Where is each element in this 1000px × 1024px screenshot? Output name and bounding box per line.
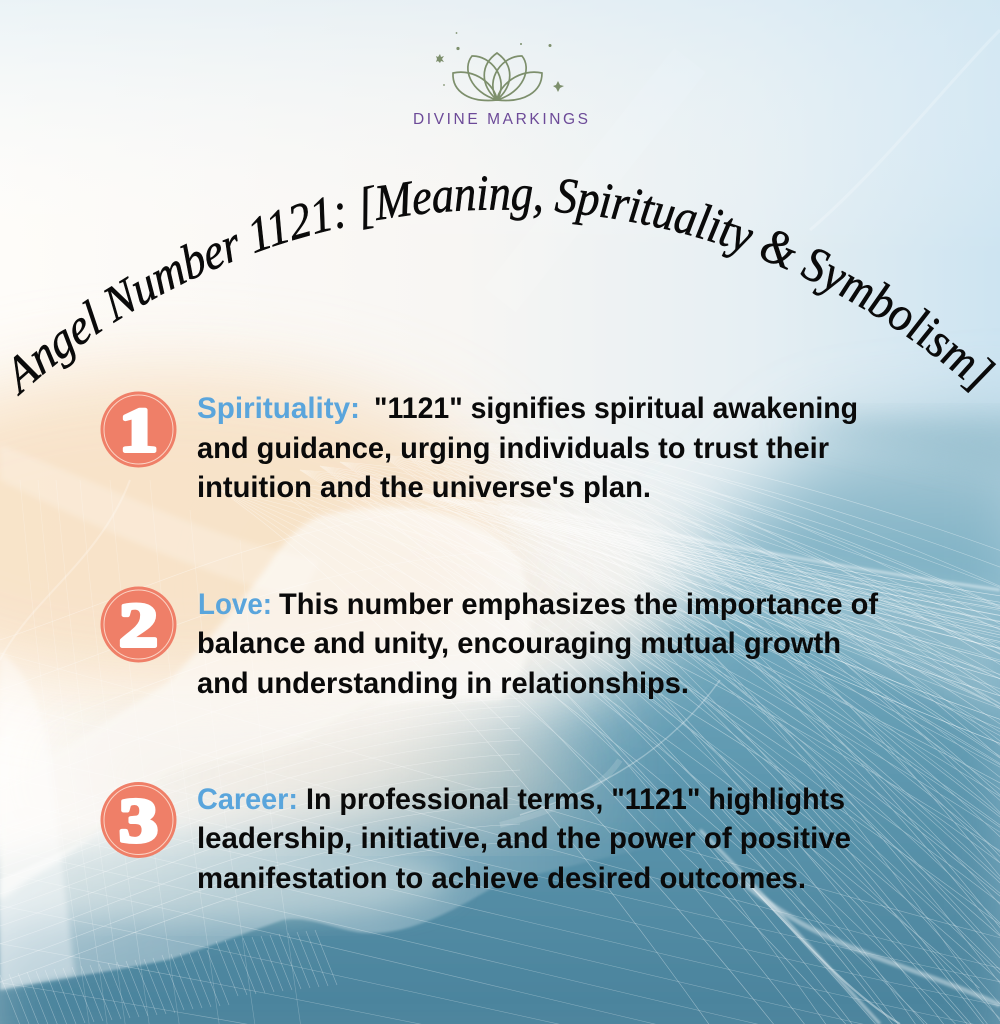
text 1: "1121" signifies spiritual awakening [374,392,858,425]
logo: Divine Markings [413,32,588,128]
text 3: In professional terms, "1121" highlights [306,783,845,816]
badge 3: 3 [119,787,158,856]
item 3: Career [100,782,851,895]
text 2: Love: [198,588,272,621]
text 3: leadership, initiative, and the power of positive [197,822,851,855]
text 2: and understanding in relationships. [197,667,689,700]
text 1: intuition and the universe's plan. [197,471,651,504]
text 3: manifestation to achieve desired outcomes. [197,862,806,895]
icon: sparkles [436,32,564,92]
badge 2: 2 [119,591,158,660]
item 2: Love [100,586,879,700]
text 1: Spirituality: [197,392,360,425]
text 2: This number emphasizes the importance of [279,588,879,621]
text 3: Career: [197,783,298,816]
title: curved heading: Angel Number 1121: [Meaning, Spirituality & Symbolism] [14,176,996,396]
text 2 [197,588,879,700]
brand name: DIVINE MARKINGS [413,111,588,128]
icon: lotus flower [453,53,542,100]
badge 2 [100,586,176,662]
text 1 [197,392,858,504]
badge 1 [100,392,176,468]
text 3 [197,783,851,895]
item 1: Spirituality [100,392,858,504]
text 1: and guidance, urging individuals to trust their [197,432,829,465]
badge 3 [100,782,176,858]
text 2: balance and unity, encouraging mutual growth [197,627,841,660]
badge 1: 1 [119,396,158,465]
